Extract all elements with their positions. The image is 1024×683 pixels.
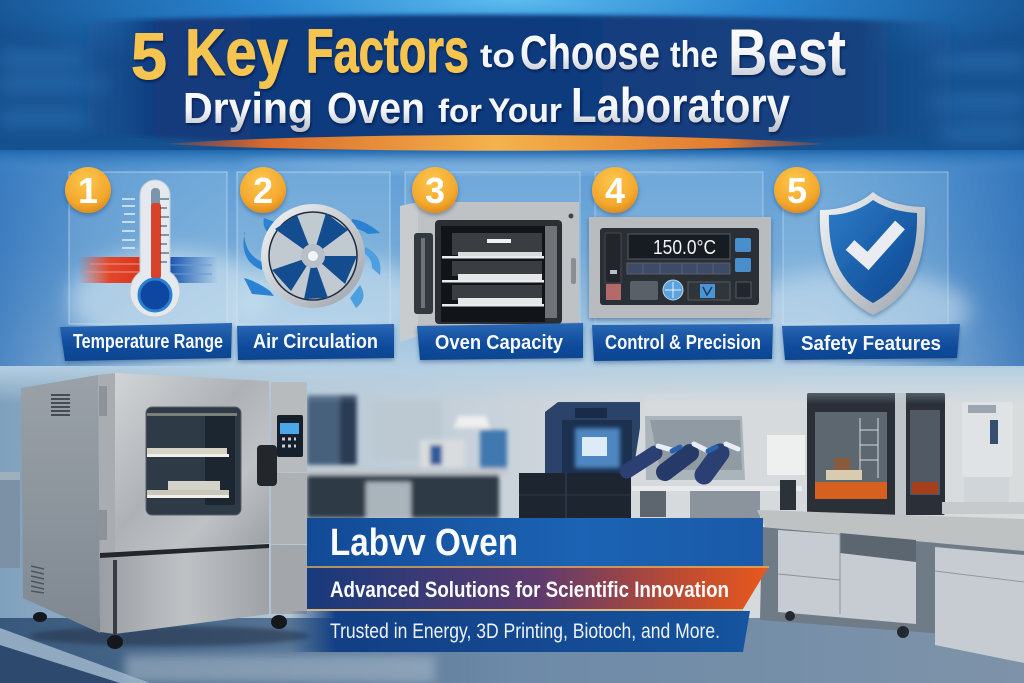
banner: industries: Trusted in Energy, 3D Printing, Biotoch, and More. xyxy=(330,620,720,643)
title: Oven xyxy=(327,84,425,133)
icon: air arrows and fan xyxy=(244,204,380,308)
title: Laboratory xyxy=(571,79,790,133)
banner: tagline xyxy=(307,566,769,610)
banner: brand name xyxy=(307,518,763,567)
header band xyxy=(70,15,970,145)
icon: control panel xyxy=(589,217,771,318)
label: safety features xyxy=(782,324,960,360)
oven window xyxy=(146,407,241,515)
oven drawer xyxy=(100,547,269,634)
banner: industries xyxy=(290,611,750,652)
label: temperature range: Temperature Range xyxy=(73,331,223,353)
badge 4 xyxy=(592,167,638,213)
drying oven product xyxy=(21,373,310,649)
oven side panel xyxy=(21,375,100,633)
label: control and precision xyxy=(592,324,773,361)
banner: brand name: Labvv Oven xyxy=(330,522,518,564)
orange accent bar xyxy=(165,135,826,151)
title: Best xyxy=(728,15,846,89)
panel 5: safety features xyxy=(774,167,960,360)
title xyxy=(131,15,846,133)
icon: thermometer xyxy=(78,180,218,317)
panel 4: control and precision xyxy=(589,167,773,361)
title: Drying xyxy=(183,84,313,133)
title: to xyxy=(480,37,515,74)
badge 2 xyxy=(240,167,286,213)
background: lower lab scene xyxy=(0,360,1024,683)
oven wheels xyxy=(33,612,287,649)
banner: tagline: Advanced Solutions for Scientific Innovation xyxy=(330,577,729,602)
gloves xyxy=(627,444,738,475)
badge 5: 5 xyxy=(787,170,807,211)
icon: shield with check xyxy=(820,192,925,315)
lab equipment: glovebox xyxy=(627,388,805,518)
badge 3: 3 xyxy=(425,170,445,211)
background: header xyxy=(0,0,1024,174)
lab counter and cabinets xyxy=(757,510,1024,663)
label: air circulation xyxy=(237,324,394,360)
background: middle band xyxy=(0,150,1024,404)
title: for xyxy=(438,93,482,129)
lab equipment: 3D printer xyxy=(807,393,945,515)
lab equipment: dark instrument and cabinets xyxy=(519,402,640,518)
title: 5 xyxy=(131,19,167,93)
label: safety features: Safety Features xyxy=(801,333,941,355)
label: oven capacity xyxy=(417,323,583,360)
label: temperature range xyxy=(60,323,232,361)
panel 1: temperature range xyxy=(60,167,232,361)
badge 4: 4 xyxy=(605,170,625,211)
badge 3 xyxy=(412,167,458,213)
brand banner xyxy=(290,518,769,652)
oven handle xyxy=(257,445,277,486)
badge 1 xyxy=(65,167,111,213)
badge 1: 1 xyxy=(78,170,98,211)
badge 5 xyxy=(774,167,820,213)
panel 2: air circulation xyxy=(237,167,394,360)
title: Key xyxy=(185,15,288,89)
icon: control panel: 150.0°C xyxy=(653,237,716,259)
icon: oven interior xyxy=(400,202,579,342)
title: Factors xyxy=(306,17,469,86)
lab equipment: white analyzer xyxy=(942,402,1024,514)
title: Your xyxy=(488,92,562,130)
badge 2: 2 xyxy=(253,170,273,211)
oven door xyxy=(98,373,115,555)
label: oven capacity: Oven Capacity xyxy=(435,332,564,354)
title: Choose xyxy=(520,27,660,80)
panel 3: oven capacity xyxy=(400,167,583,360)
oven control column xyxy=(271,382,307,614)
title: the xyxy=(670,34,718,75)
label: control and precision: Control & Precision xyxy=(605,332,761,354)
label: air circulation: Air Circulation xyxy=(253,331,378,353)
